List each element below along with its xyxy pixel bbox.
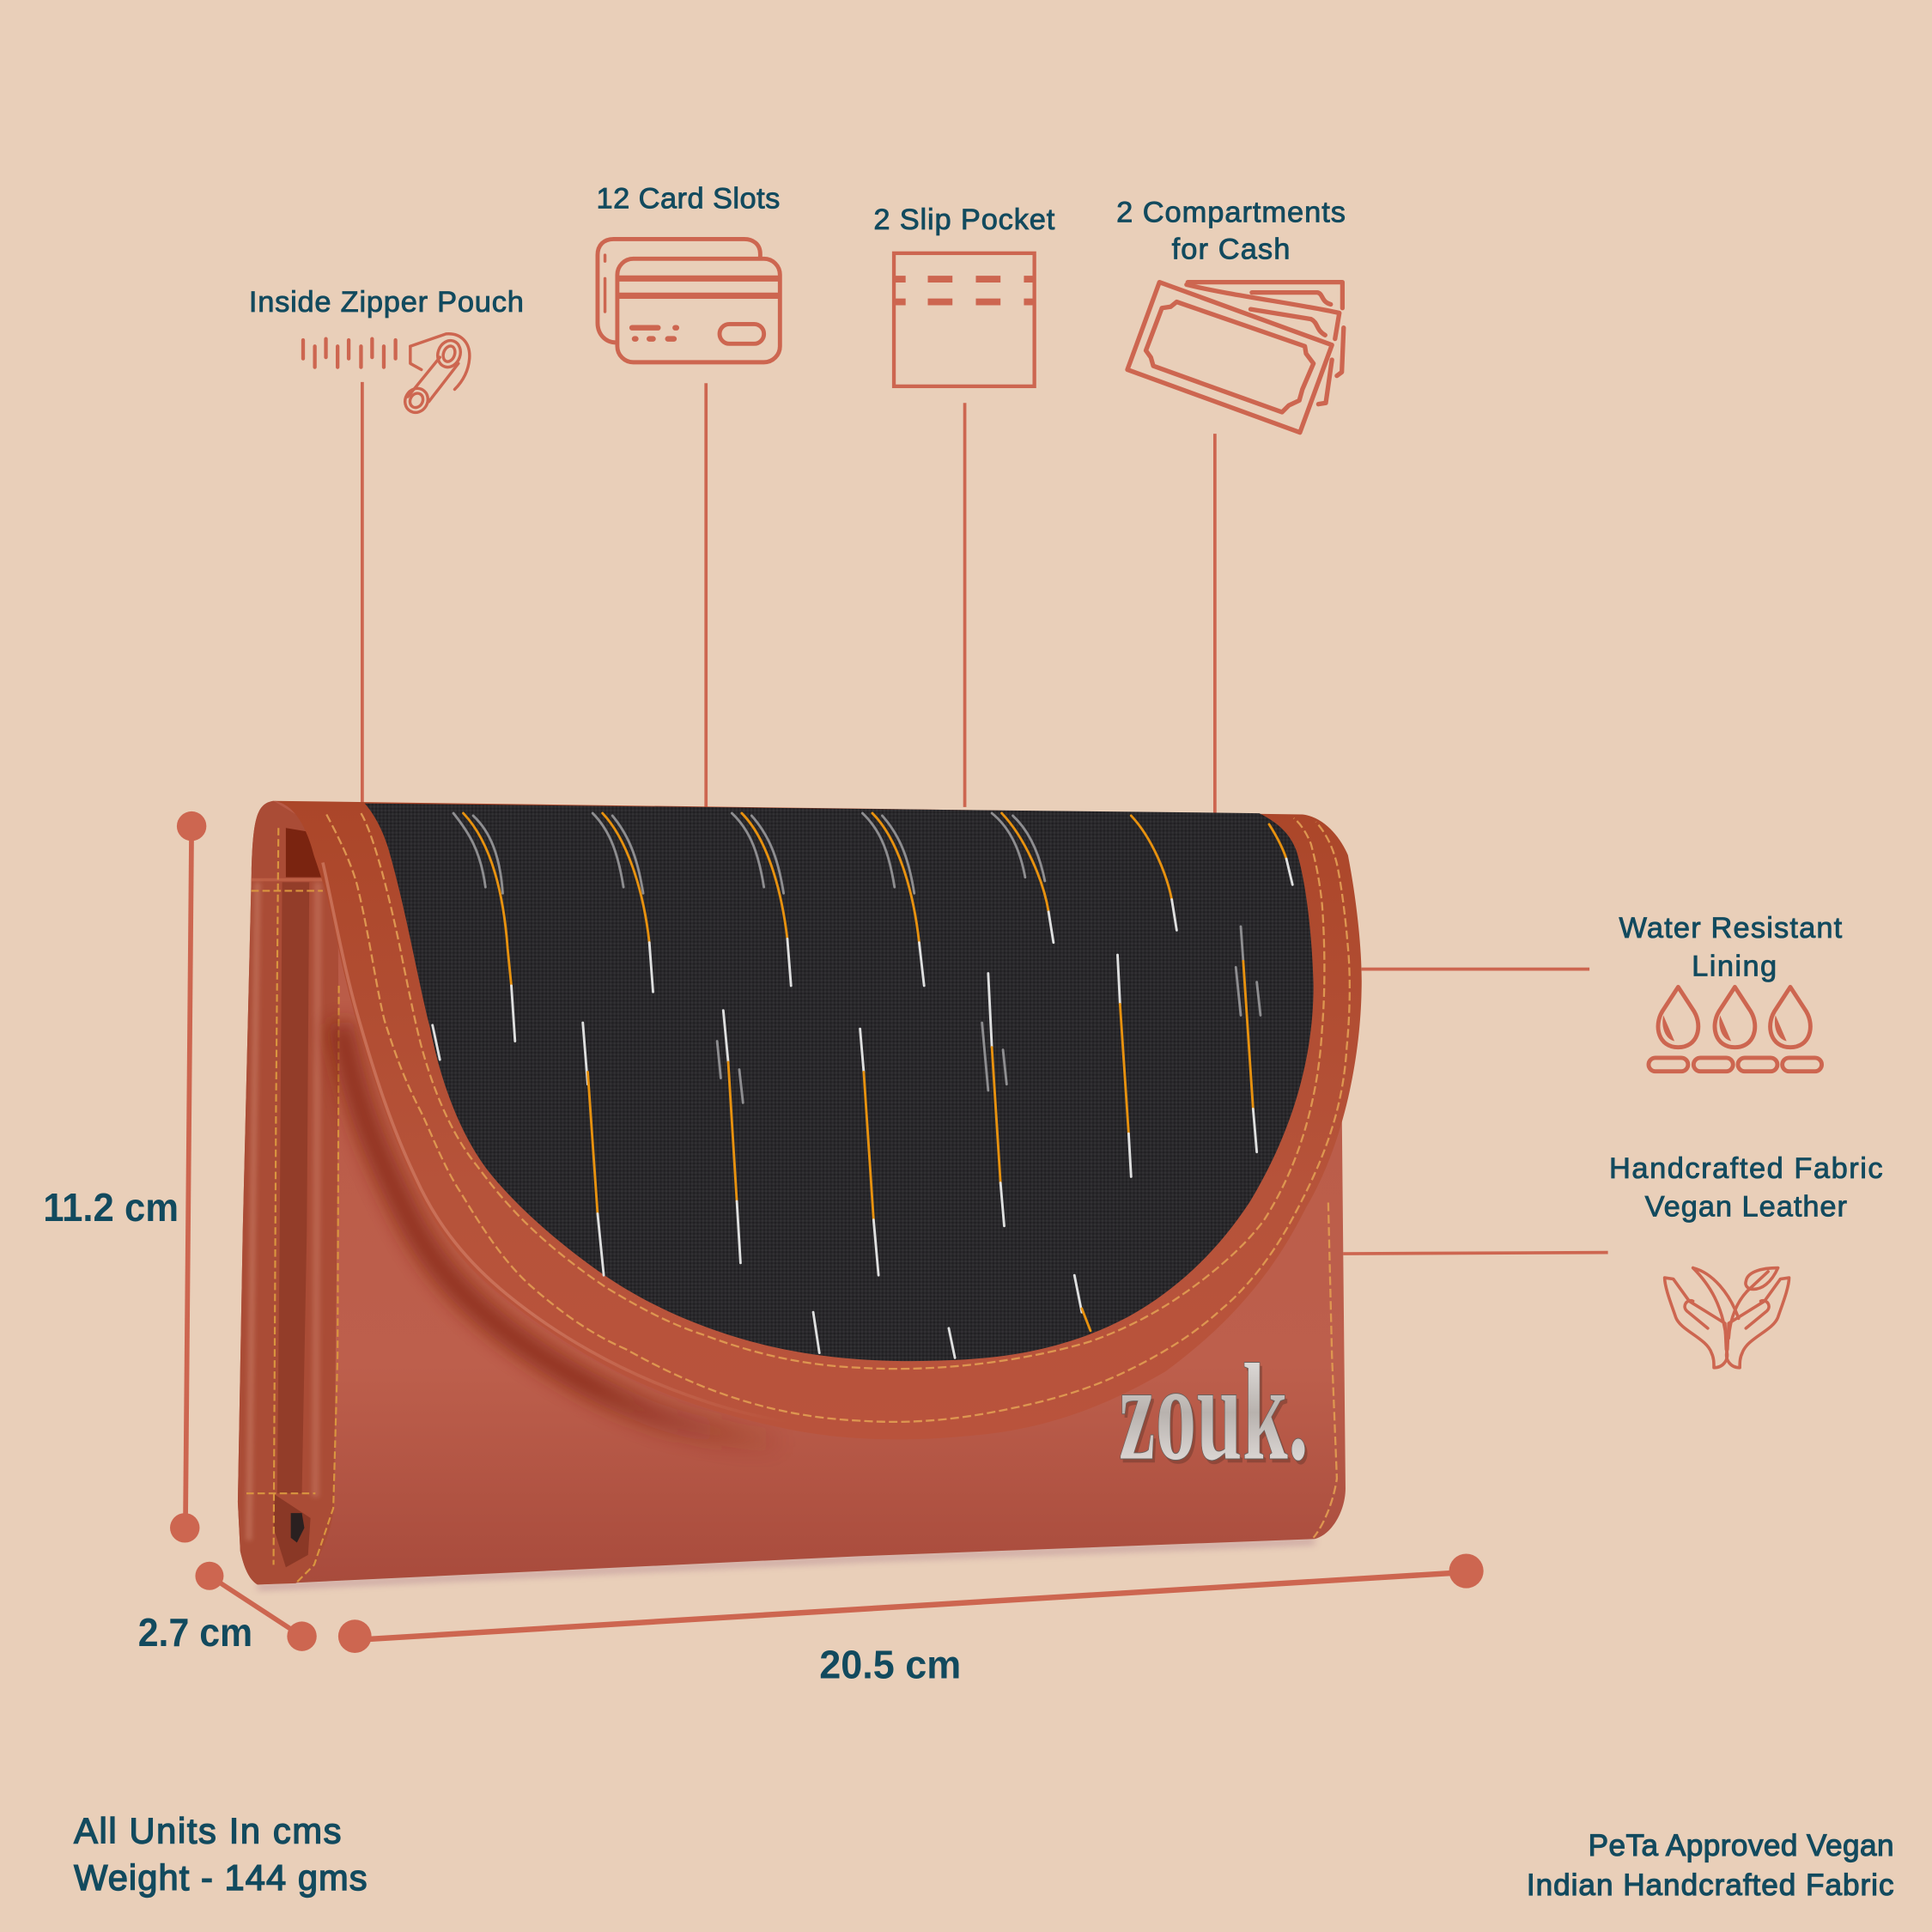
leader line: cash (1214, 434, 1216, 813)
label: 12 card slots: 12 Card Slots (597, 183, 780, 216)
ikat streaks (433, 813, 1292, 1358)
label: 2 compartments for cash: for Cash (1172, 233, 1290, 265)
note: units and weight (74, 1811, 368, 1898)
flap stitching (326, 813, 1350, 1538)
label: 2 compartments for cash (1116, 196, 1346, 265)
dimension: depth 2.7 cm (138, 1562, 317, 1655)
label: handcrafted fabric vegan leather (1609, 1152, 1883, 1223)
note: vegan and handcrafted: PeTa Approved Vegan (1589, 1829, 1894, 1862)
feature: handcrafted fabric vegan leather (1343, 1152, 1883, 1368)
flap piped edge (323, 862, 788, 1422)
note: units and weight: All Units In cms (74, 1811, 341, 1851)
icon: zipper (303, 334, 470, 416)
icon: hands with leaf (1665, 1268, 1789, 1368)
zouk metal logo: zouk. (1119, 1336, 1309, 1490)
wallet body (238, 801, 1346, 1584)
note: units and weight: Weight - 144 gms (74, 1857, 368, 1898)
label: inside zipper pouch: Inside Zipper Pouch (249, 286, 524, 319)
leader line: cards (705, 383, 708, 807)
shadow under flap (340, 1023, 801, 1444)
icon: water drops (1649, 987, 1822, 1072)
ground shadow (258, 1541, 1315, 1587)
left gusset (238, 801, 339, 1584)
wallet photo illustration (238, 801, 1362, 1587)
label: 2 compartments for cash: 2 Compartments (1116, 196, 1346, 228)
label: water resistant lining: Lining (1692, 950, 1777, 982)
label: handcrafted fabric vegan leather: Vegan Leather (1645, 1190, 1847, 1223)
leader line: lining (1362, 968, 1589, 970)
leader line: zipper (361, 382, 363, 805)
feature: water resistant lining (1362, 912, 1843, 1072)
label: handcrafted fabric vegan leather: Handcrafted Fabric (1609, 1152, 1883, 1185)
feature: slip pocket (873, 204, 1055, 807)
label: 2.7 cm: 2.7 cm (138, 1610, 252, 1655)
icon: pocket (893, 253, 1035, 386)
feature: cash compartments (1116, 196, 1346, 813)
feature: card slots (597, 183, 780, 807)
flap leather trim (274, 801, 1362, 1439)
icon: banknotes (1127, 283, 1344, 433)
feature: inside zipper pouch (249, 286, 524, 805)
dimension: height 11.2 cm (43, 811, 206, 1543)
label: 20.5 cm: 20.5 cm (819, 1642, 961, 1686)
note: vegan and handcrafted (1527, 1829, 1894, 1902)
label: water resistant lining: Water Resistant (1619, 912, 1843, 945)
zouk metal logo: zouk. (1121, 1340, 1311, 1493)
label: 11.2 cm: 11.2 cm (43, 1185, 179, 1230)
label: water resistant lining (1619, 912, 1843, 982)
note: vegan and handcrafted: Indian Handcrafted Fabric (1527, 1868, 1894, 1902)
ikat fabric panel (365, 804, 1314, 1361)
leader line: leather (1343, 1253, 1608, 1254)
label: 2 slip pocket: 2 Slip Pocket (873, 204, 1055, 236)
zouk metal logo (1119, 1336, 1311, 1493)
dimension: width 20.5 cm (338, 1553, 1484, 1686)
icon: cards (598, 239, 780, 362)
leader line: pocket (963, 403, 966, 807)
